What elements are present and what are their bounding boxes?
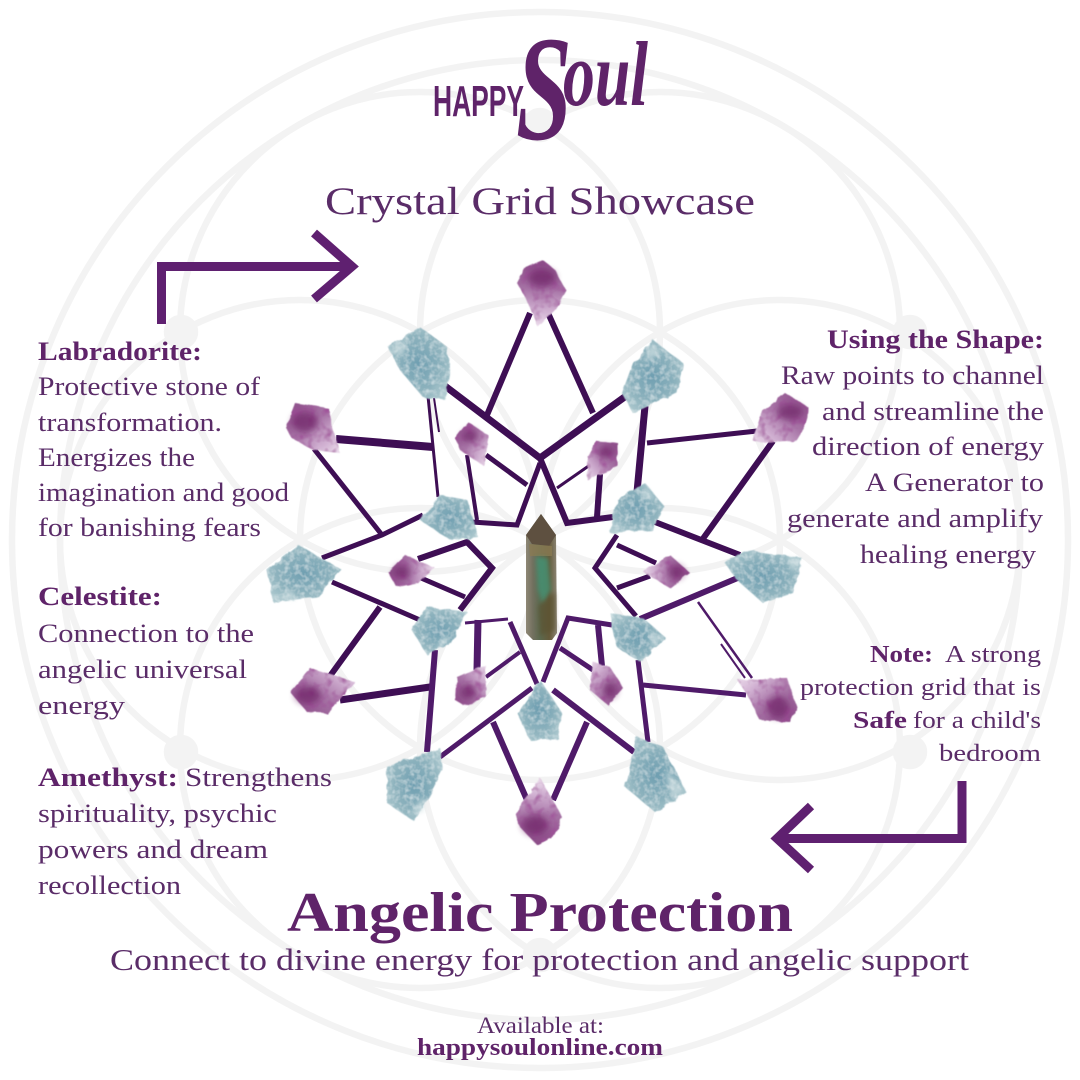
text: Note: A strong <box>945 642 1041 668</box>
text: Celestite: Connection to the <box>38 618 254 648</box>
text: Labradorite: Protective stone of <box>38 371 260 401</box>
crystal: labradorite generator point <box>526 514 557 640</box>
text: Amethyst: spirituality, psychic <box>38 798 277 828</box>
text: Using the Shape: healing energy <box>860 539 1037 569</box>
logo: Happy Soul: HAPPY <box>433 77 524 126</box>
lower lines <box>427 577 752 800</box>
text: Using the Shape: direction of energy <box>812 431 1045 461</box>
text: Celestite <box>38 581 254 720</box>
text: Amethyst: Amethyst: <box>38 762 178 792</box>
arrow: top left bent right <box>162 233 352 324</box>
crystals: celestite rough stones <box>267 327 802 822</box>
crystal grid lines: star shape <box>314 313 773 800</box>
text: Note <box>800 642 1041 767</box>
text: Labradorite: imagination and good <box>38 477 289 507</box>
arrow: bottom right bent left <box>777 781 962 870</box>
text: Labradorite: Energizes the <box>38 442 195 472</box>
text: Using the Shape: generate and amplify <box>787 503 1044 533</box>
amethyst dark inclusions <box>292 269 803 835</box>
footer: availability <box>417 1013 663 1061</box>
text: Note: for a child's <box>913 708 1041 734</box>
text: Using the Shape: and streamline the <box>822 396 1044 426</box>
text: Amethyst <box>38 762 332 900</box>
main heading: Angelic Protection: Angelic Protection <box>287 882 793 944</box>
text: Using the Shape <box>781 324 1045 569</box>
text: Using the Shape: A Generator to <box>865 467 1044 497</box>
text: Note: bedroom <box>939 741 1041 767</box>
text: Using the Shape: Using the Shape: <box>827 324 1044 354</box>
text: Labradorite: transformation. <box>38 407 222 437</box>
celestite pale facets <box>278 340 800 815</box>
text: Amethyst: recollection <box>38 870 181 900</box>
text: Celestite: Celestite: <box>38 581 162 611</box>
text: Using the Shape: Raw points to channel <box>781 360 1044 390</box>
text: Note: Note: <box>870 642 933 668</box>
text: Celestite: energy <box>38 690 126 720</box>
logo: Happy Soul: oul <box>563 23 648 125</box>
text: Note: protection grid that is <box>800 675 1041 701</box>
text: Amethyst: Strengthens <box>185 762 332 792</box>
crystals: amethyst points <box>286 260 808 845</box>
title: Crystal Grid Showcase: Crystal Grid Showcase <box>325 180 755 223</box>
text: Note: Safe <box>853 708 907 734</box>
footer: availability: happysoulonline.com <box>417 1035 663 1061</box>
logo: Happy Soul: S <box>516 6 572 172</box>
text: Labradorite: Labradorite: <box>38 336 202 366</box>
upper lines <box>314 313 773 700</box>
subheading: Connect to divine energy for protection and angelic support <box>110 942 969 977</box>
text: Labradorite <box>38 336 289 542</box>
text: Amethyst: powers and dream <box>38 834 268 864</box>
logo: Happy Soul <box>433 6 648 172</box>
footer: availability: Available at: <box>477 1013 604 1038</box>
text: Labradorite: for banishing fears <box>38 512 261 542</box>
text: Celestite: angelic universal <box>38 654 247 684</box>
